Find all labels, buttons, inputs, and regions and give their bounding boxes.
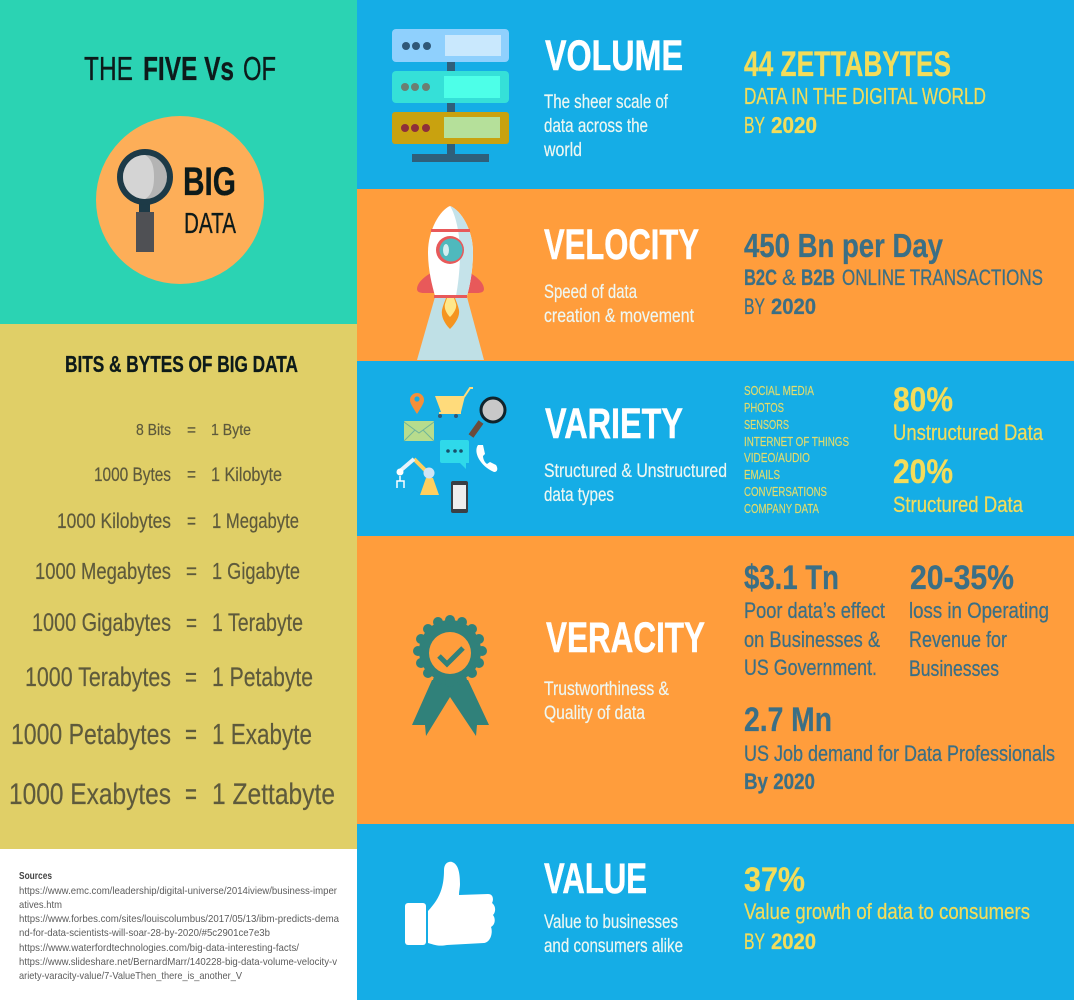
data type list: VIDEO/AUDIO	[744, 450, 810, 465]
conversion table: =	[186, 609, 197, 637]
heading: volume: VOLUME	[545, 32, 683, 80]
conversion table: =	[187, 510, 196, 533]
velocity description: creation & movement	[544, 305, 694, 327]
volume description	[543, 91, 668, 161]
volume stat: BY	[744, 112, 765, 138]
data type list	[744, 383, 849, 516]
volume stat	[744, 45, 986, 138]
icon: envelope	[404, 421, 434, 441]
panel: sources: https://www.waterfordtechnologies.com/big-data-interesting-facts/	[19, 942, 299, 954]
velocity stat: B2C	[744, 265, 777, 290]
stat: 80 percent unstructured: Unstructured Data	[893, 420, 1044, 445]
stat: 20-35 percent: Businesses	[909, 656, 999, 681]
heading: variety: VARIETY	[545, 400, 683, 448]
panel: velocity	[357, 189, 1074, 361]
heading: velocity: VELOCITY	[544, 221, 699, 269]
stat: 3.1 trillion: Poor data’s effect	[744, 598, 885, 623]
stat: 20-35 percent: loss in Operating	[909, 598, 1049, 623]
conversion table: 1000 Gigabytes	[32, 609, 171, 637]
veracity description	[544, 678, 669, 724]
icon: map pin	[410, 393, 424, 414]
conversion table: 1 Terabyte	[212, 609, 303, 637]
value stat: BY	[744, 929, 765, 954]
conversion table: =	[187, 465, 196, 486]
stat: 3.1 trillion: US Government.	[744, 655, 877, 680]
conversion table	[9, 422, 335, 811]
big data label: BIG	[183, 160, 236, 204]
panel: title	[0, 0, 357, 324]
conversion table: 1 Gigabyte	[212, 558, 300, 584]
conversion table: 1 Exabyte	[212, 719, 312, 751]
velocity stat	[744, 227, 1043, 319]
data type list: SOCIAL MEDIA	[744, 383, 814, 398]
icon: rocket	[417, 206, 484, 360]
icon: thumbs up	[405, 862, 495, 946]
stat: 2.7 million	[744, 701, 1055, 794]
title: OF	[243, 50, 276, 87]
big data label	[183, 160, 236, 240]
panel: bits and bytes	[0, 324, 357, 849]
panel: sources: ariety-varacity-value/7-ValueThen_there_is_another_V	[19, 970, 242, 982]
stat: 3.1 trillion: $3.1 Tn	[744, 559, 839, 597]
value description: Value to businesses	[544, 911, 678, 933]
icon: data sources cluster	[396, 388, 505, 513]
volume stat: 44 ZETTABYTES	[744, 45, 951, 84]
panel: sources: https://www.forbes.com/sites/louiscolumbus/2017/05/13/ibm-predicts-dema	[19, 913, 339, 925]
panel: sources: nd-for-data-scientists-will-soar-28-by-2020/#5c2901ce7e3b	[19, 927, 270, 939]
title	[84, 50, 276, 87]
variety description: Structured & Unstructured	[544, 460, 727, 482]
conversion table: =	[186, 558, 197, 584]
value stat	[744, 861, 1030, 954]
stat: 3.1 trillion: on Businesses &	[744, 627, 880, 652]
panel: sources: Sources	[19, 870, 52, 882]
veracity description: Trustworthiness &	[544, 678, 669, 700]
conversion table: 1 Byte	[211, 422, 251, 439]
data type list: CONVERSATIONS	[744, 484, 827, 499]
icon: shopping cart	[435, 388, 473, 418]
title: THE	[84, 50, 133, 87]
conversion table: 1000 Terabytes	[25, 662, 171, 692]
icon: award ribbon	[412, 615, 489, 736]
velocity stat: 450 Bn per Day	[744, 227, 944, 264]
velocity description: Speed of data	[544, 281, 637, 303]
stat: 2.7 million: 2.7 Mn	[744, 701, 832, 739]
panel: veracity	[357, 536, 1074, 824]
stat: 20-35 percent: 20-35%	[910, 559, 1014, 597]
data type list: COMPANY DATA	[744, 501, 819, 516]
velocity stat: BY	[744, 294, 765, 319]
volume description: The sheer scale of	[544, 91, 668, 113]
conversion table: =	[185, 719, 197, 751]
value stat: Value growth of data to consumers	[744, 899, 1030, 924]
heading: veracity: VERACITY	[546, 614, 705, 662]
conversion table: =	[185, 778, 197, 811]
value description: and consumers alike	[544, 935, 683, 957]
stat: 20 percent structured	[893, 453, 1024, 517]
icon: magnifier	[471, 398, 505, 436]
stat: 20-35 percent	[909, 559, 1049, 681]
conversion table: 1000 Megabytes	[35, 558, 171, 584]
panel: sources: atives.htm	[19, 899, 62, 911]
veracity description: Quality of data	[544, 702, 645, 724]
variety description: data types	[544, 484, 614, 506]
conversion table: 1000 Kilobytes	[57, 510, 171, 533]
big data badge	[96, 116, 264, 284]
data type list: INTERNET OF THINGS	[744, 434, 849, 449]
conversion table: 1000 Exabytes	[9, 778, 171, 811]
conversion table: 1 Megabyte	[212, 510, 299, 533]
data type list: SENSORS	[744, 417, 789, 432]
panel: volume	[357, 0, 1074, 189]
heading: value: VALUE	[544, 855, 647, 903]
volume stat: DATA IN THE DIGITAL WORLD	[744, 83, 986, 109]
panel: sources: https://www.slideshare.net/BernardMarr/140228-big-data-volume-velocity-v	[19, 956, 338, 968]
conversion table: 8 Bits	[136, 422, 171, 439]
stat: 80 percent unstructured: 80%	[893, 381, 953, 419]
icon: server stack	[392, 29, 509, 162]
data type list: EMAILS	[744, 467, 780, 482]
value description	[544, 911, 683, 957]
big data label: DATA	[184, 208, 236, 240]
velocity stat: B2B	[801, 265, 835, 290]
panel: variety	[357, 361, 1074, 536]
title: FIVE Vs	[143, 50, 234, 87]
panel: sources: https://www.emc.com/leadership/digital-universe/2014iview/business-imper	[19, 885, 337, 897]
conversion table: =	[185, 662, 197, 692]
conversion table: =	[187, 422, 196, 439]
panel: value	[357, 824, 1074, 1000]
icon: phone handset	[476, 445, 497, 472]
volume description: world	[543, 139, 582, 161]
data type list: PHOTOS	[744, 400, 784, 415]
icon: robot arm	[396, 459, 439, 495]
icon: chat bubble	[440, 440, 469, 469]
stat: 2.7 million: By 2020	[744, 769, 815, 794]
conversion table: 1 Kilobyte	[211, 465, 282, 486]
stat: 20-35 percent: Revenue for	[909, 627, 1007, 652]
volume description: data across the	[544, 115, 648, 137]
stat: 80 percent unstructured	[893, 381, 1044, 445]
icon: smartphone	[451, 481, 468, 513]
heading: bits and bytes: BITS & BYTES OF BIG DATA	[65, 351, 298, 377]
conversion table: 1 Petabyte	[212, 662, 313, 692]
value stat: 37%	[744, 861, 805, 899]
stat: 20 percent structured: 20%	[893, 453, 953, 491]
velocity stat: 2020	[771, 294, 816, 319]
conversion table: 1000 Bytes	[94, 465, 171, 486]
velocity stat: &	[782, 265, 796, 290]
panel: sources	[0, 849, 357, 1000]
icon: magnifying glass	[117, 149, 173, 252]
variety description	[544, 460, 727, 506]
value stat: 2020	[771, 929, 816, 954]
stat: 3.1 trillion	[744, 559, 885, 680]
volume stat: 2020	[771, 112, 817, 138]
conversion table: 1000 Petabytes	[11, 719, 171, 751]
conversion table: 1 Zettabyte	[212, 778, 335, 811]
velocity description	[544, 281, 694, 327]
stat: 20 percent structured: Structured Data	[893, 492, 1024, 517]
